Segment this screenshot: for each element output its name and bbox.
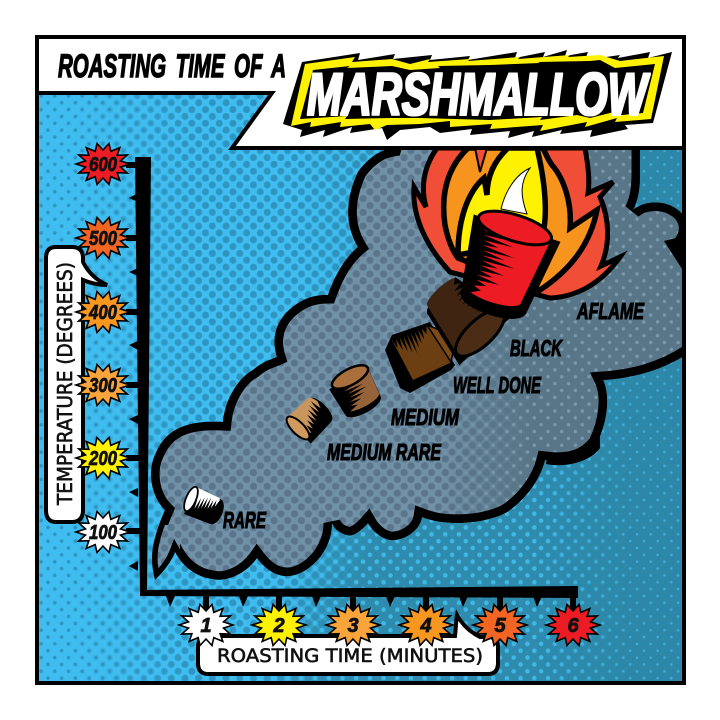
axis label bubble: roasting time: ROASTING TIME (MINUTES) — [217, 645, 483, 667]
star 200 — [76, 438, 130, 478]
star 400 — [76, 292, 130, 332]
flames — [414, 148, 620, 298]
star 200: 200 — [88, 448, 117, 470]
marshmallow: aflame — [454, 204, 557, 320]
time axis with ticks — [140, 586, 578, 612]
axis label bubble: roasting time — [198, 615, 498, 674]
label: rare: RARE — [223, 507, 266, 533]
time stars — [179, 604, 600, 646]
star 2: 2 — [272, 615, 285, 637]
star 1: 1 — [200, 615, 212, 637]
star 100: 100 — [89, 522, 117, 544]
star 100 — [76, 512, 130, 552]
marshmallow: rare — [181, 485, 226, 526]
star 3: 3 — [347, 615, 359, 637]
star 500: 500 — [89, 228, 117, 250]
marshmallow: medium rare — [283, 394, 334, 445]
label: medium: MEDIUM — [391, 404, 460, 430]
star 600: 600 — [89, 154, 117, 176]
star 400: 400 — [88, 302, 117, 324]
smoke cloud speech bubble — [151, 150, 682, 580]
star 5 — [473, 604, 527, 646]
label: medium rare: MEDIUM RARE — [327, 439, 441, 465]
marshmallow: well done — [385, 322, 455, 393]
temperature stars — [76, 144, 130, 552]
star 300 — [76, 364, 130, 406]
star 4: 4 — [419, 615, 432, 637]
title banner — [37, 37, 684, 148]
axis label bubble: temperature: TEMPERATURE (DEGREES) — [53, 262, 77, 506]
star 6: 6 — [567, 615, 579, 637]
star 500 — [76, 218, 130, 258]
axis label bubble: temperature — [46, 247, 107, 522]
marshmallow: black — [414, 267, 512, 366]
star 1 — [179, 604, 233, 646]
title burst: marshmallow — [283, 50, 672, 140]
star 2 — [252, 604, 306, 646]
title line: roasting time of a: ROASTING TIME OF A — [58, 48, 286, 84]
marshmallow: medium — [327, 361, 385, 420]
temperature axis with ticks — [126, 157, 151, 595]
star 4 — [399, 604, 453, 646]
label: well done: WELL DONE — [453, 372, 541, 398]
star 5: 5 — [494, 615, 506, 637]
star 6 — [546, 604, 600, 646]
label: black: BLACK — [510, 335, 563, 361]
star 3 — [326, 604, 380, 646]
star 300: 300 — [89, 375, 117, 397]
star 600 — [76, 144, 130, 184]
label: aflame: AFLAME — [576, 298, 644, 324]
